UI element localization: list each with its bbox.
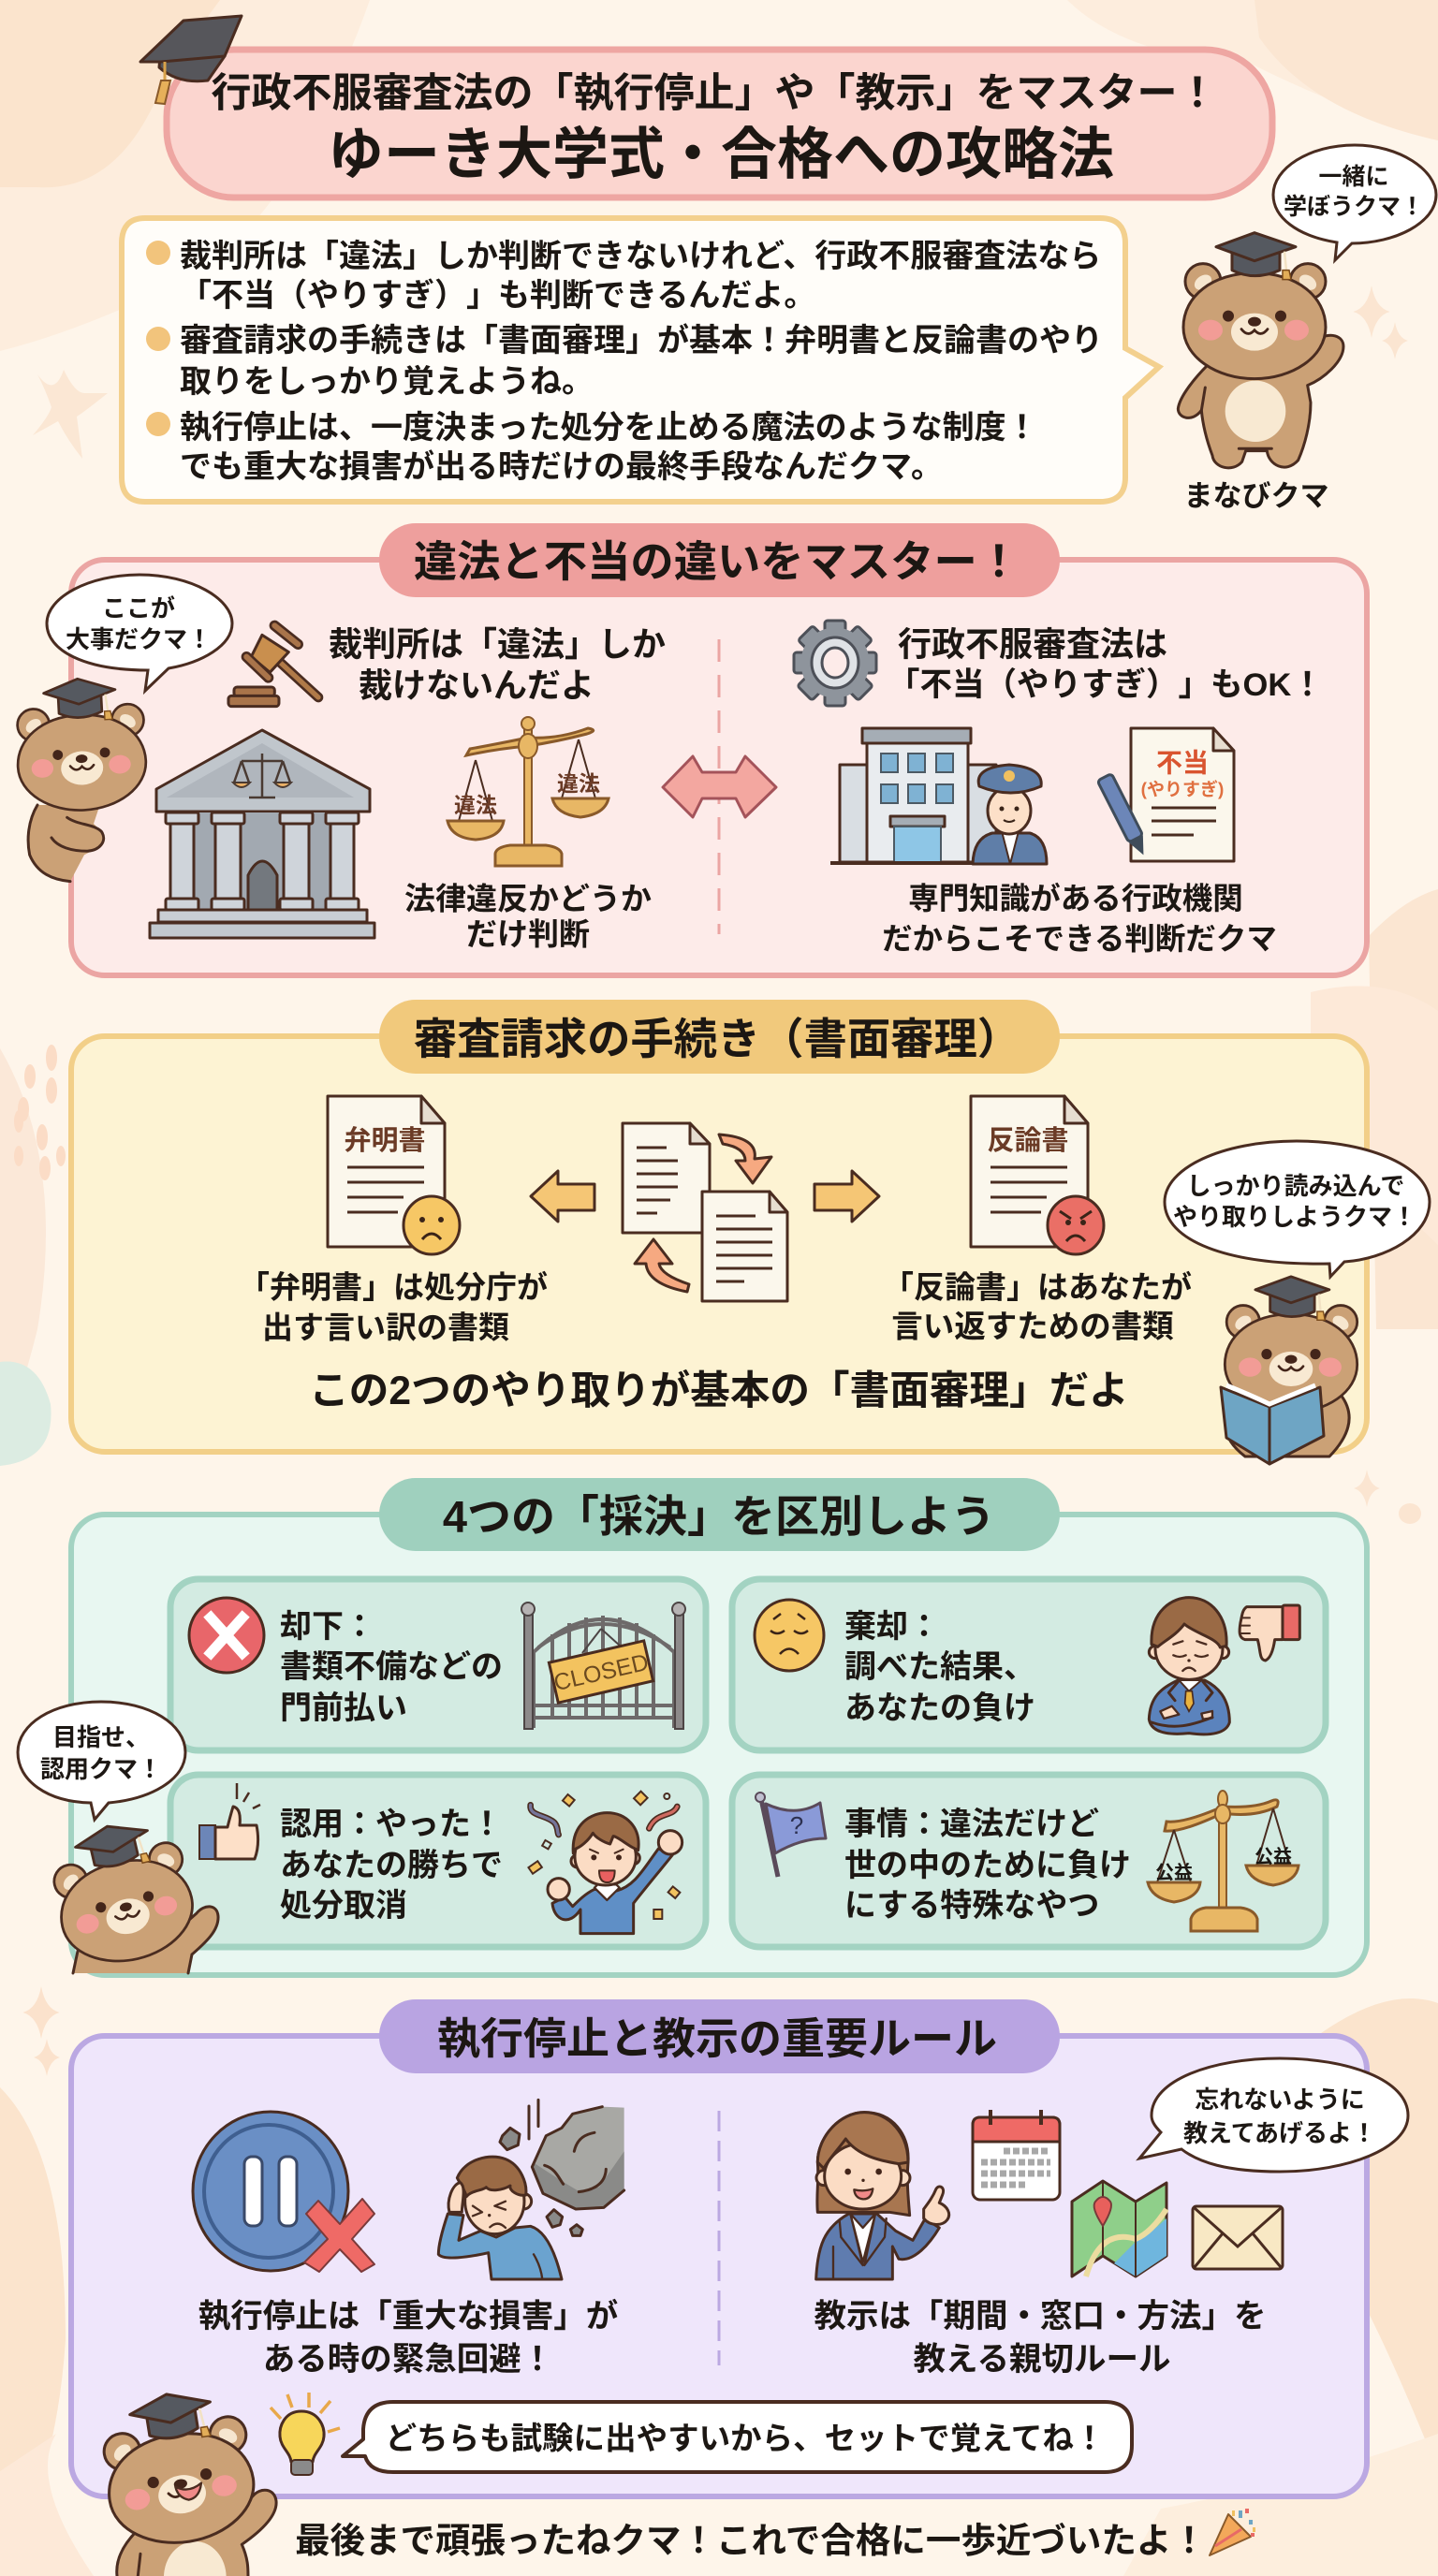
heading: 4つの「採決」を区別しよう — [443, 1492, 995, 1541]
heading — [379, 523, 1060, 597]
icon: gavel — [228, 625, 318, 707]
caption: instruction: 教える親切ルール — [914, 2342, 1170, 2378]
icon: document unjust: (やりすぎ) — [1141, 779, 1224, 799]
icon: document unjust — [1131, 728, 1234, 861]
icon: x circle — [189, 1598, 264, 1673]
text: admin review: 行政不服審査法は — [898, 625, 1167, 663]
bullet 1: 「不当（やりすぎ）」も判断できるんだよ。 — [180, 278, 815, 314]
bear: peeking — [13, 676, 148, 882]
caption: law only — [404, 882, 652, 951]
text: あなたの勝ちで — [280, 1848, 503, 1883]
arrow: left — [531, 1171, 594, 1222]
bullet 3 — [146, 410, 1038, 485]
text: courts — [329, 625, 666, 704]
callout: exam hint: どちらも試験に出やすいから、セットで覚えてね！ — [386, 2422, 1105, 2456]
caption: benmeisho: 「弁明書」は処分庁が — [239, 1269, 548, 1305]
text — [280, 1609, 503, 1726]
speech bubble: together: 学ぼうクマ！ — [1284, 194, 1424, 220]
icon: person under rock — [438, 2100, 624, 2279]
document: hanronsho — [971, 1096, 1104, 1254]
icon: light bulb — [271, 2393, 340, 2475]
title line 2: ゆーき大学式・合格への攻略法 — [328, 124, 1114, 185]
text: admin review — [888, 625, 1324, 703]
arrow: double — [663, 756, 776, 817]
speech bubble: teach: 忘れないように — [1195, 2086, 1365, 2114]
icon: closed gate: CLOSED — [551, 1649, 651, 1696]
icon: party popper — [1210, 2509, 1255, 2555]
heading: 執行停止と教示の重要ルール — [437, 2014, 997, 2063]
bear: manabi kuma — [1178, 233, 1343, 468]
text: 処分取消 — [280, 1888, 407, 1924]
closing message: 最後まで頑張ったねクマ！これで合格に一歩近づいたよ！ — [295, 2521, 1207, 2560]
icon: scale: 違法 — [454, 793, 497, 817]
icon: scale public interest: 公益 — [1255, 1846, 1292, 1867]
speech bubble: together: 一緒に — [1318, 164, 1389, 190]
document: benmeisho: 弁明書 — [344, 1125, 426, 1156]
caption: instruction: 教示は「期間・窓口・方法」を — [814, 2299, 1266, 2334]
callout: exam hint — [343, 2402, 1132, 2472]
icon: flag — [756, 1793, 826, 1877]
caption: hanronsho: 「反論書」はあなたが — [883, 1269, 1192, 1305]
heading — [379, 1000, 1060, 1074]
bear name: まなびクマ — [1183, 479, 1329, 513]
title banner — [167, 50, 1272, 198]
bullet 1: 裁判所は「違法」しか判断できないけれど、行政不服審査法なら — [180, 239, 1101, 274]
text: 門前払い — [280, 1690, 407, 1726]
heading: 違法と不当の違いをマスター！ — [414, 537, 1020, 586]
caption: law only: だけ判断 — [466, 917, 590, 951]
text: にする特殊なやつ — [844, 1888, 1099, 1924]
caption: hanronsho: 言い返すための書類 — [891, 1310, 1174, 1344]
icon: document unjust: 不当 — [1156, 749, 1209, 777]
text: 認用：やった！ — [280, 1807, 503, 1842]
icon: cheering man — [528, 1792, 682, 1934]
caption: hanronsho — [883, 1269, 1192, 1344]
title line 1: 行政不服審査法の「執行停止」や「教示」をマスター！ — [212, 71, 1217, 116]
caption: instruction — [814, 2299, 1266, 2378]
caption: expertise: 専門知識がある行政機関 — [908, 881, 1243, 915]
speech bubble: important: 大事だクマ！ — [66, 625, 212, 653]
speech bubble: together — [1273, 145, 1436, 260]
text: 事情：違法だけど — [844, 1807, 1099, 1842]
text: courts: 裁けないんだよ — [359, 666, 594, 704]
caption: stay — [198, 2298, 618, 2378]
text: admin review: 「不当（やりすぎ）」もOK！ — [888, 667, 1324, 703]
icon: sad face — [755, 1600, 824, 1671]
icon: pen — [1097, 773, 1151, 858]
icon: gear — [794, 621, 876, 706]
icon: scale: 違法 — [557, 771, 600, 796]
card: rejection — [732, 1579, 1326, 1750]
text: 書類不備などの — [280, 1649, 503, 1685]
speech bubble: read carefully: やり取りしようクマ！ — [1173, 1203, 1416, 1231]
bullet 2: 取りをしっかり覚えようね。 — [180, 364, 594, 400]
icon: envelope — [1193, 2206, 1283, 2269]
text: 世の中のために負け — [844, 1848, 1131, 1883]
bear: cheering bottom — [95, 2383, 276, 2576]
card: special — [732, 1775, 1326, 1947]
icon: scale public interest — [1148, 1791, 1299, 1931]
caption: expertise — [882, 881, 1277, 956]
speech bubble: teach — [1139, 2058, 1408, 2172]
bear: waving — [43, 1811, 218, 1973]
icon: scale public interest: 公益 — [1155, 1862, 1193, 1883]
icon: exchanged documents — [623, 1123, 787, 1301]
document: hanronsho: 反論書 — [987, 1125, 1069, 1156]
icon: thumb up — [199, 1783, 260, 1859]
icon: office building — [830, 728, 996, 863]
text — [280, 1807, 503, 1924]
bullet 3: 執行停止は、一度決まった処分を止める魔法のような制度！ — [180, 410, 1038, 446]
icon: pause with x — [193, 2112, 374, 2272]
caption: law only: 法律違反かどうか — [404, 882, 652, 915]
panel: four decisions — [71, 1478, 1367, 1975]
text: 却下： — [280, 1609, 375, 1645]
document: benmeisho — [328, 1096, 460, 1254]
icon: courthouse — [150, 730, 374, 938]
caption: benmeisho: 出す言い訳の書類 — [262, 1310, 509, 1344]
icon: flag: ? — [790, 1811, 803, 1839]
speech bubble: important — [47, 575, 232, 691]
panel: written review — [71, 1000, 1367, 1452]
speech bubble: aim for approval: 目指せ、 — [52, 1723, 150, 1751]
bullet 2: 審査請求の手続きは「書面審理」が基本！弁明書と反論書のやり — [180, 322, 1103, 359]
caption: benmeisho — [239, 1269, 548, 1344]
icon: calendar — [973, 2110, 1060, 2200]
text: あなたの負け — [844, 1690, 1035, 1726]
icon: officer — [973, 765, 1047, 864]
speech bubble: important: ここが — [102, 594, 175, 622]
arrow: right — [814, 1171, 879, 1222]
panel: stay of execution and instruction — [71, 1999, 1408, 2496]
summary text: この2つのやり取りが基本の「書面審理」だよ — [309, 1368, 1129, 1413]
icon: closed gate — [521, 1603, 685, 1729]
icon: graduation cap — [140, 16, 242, 104]
text: courts: 裁判所は「違法」しか — [329, 625, 666, 663]
text — [844, 1609, 1035, 1726]
speech bubble: read carefully: しっかり読み込んで — [1187, 1172, 1404, 1200]
intro bubble — [122, 218, 1159, 502]
icon: scale — [448, 717, 609, 866]
bullet 2 — [146, 322, 1103, 400]
panel: illegal vs unjust — [71, 523, 1367, 975]
speech bubble: aim for approval — [18, 1702, 185, 1820]
text — [844, 1807, 1131, 1924]
speech bubble: teach: 教えてあげるよ！ — [1183, 2119, 1376, 2147]
icon: thumb down — [1240, 1605, 1299, 1661]
bullet 3: でも重大な損害が出る時だけの最終手段なんだクマ。 — [180, 448, 943, 485]
bear: reading — [1221, 1277, 1357, 1464]
icon: woman — [816, 2113, 949, 2279]
speech bubble: aim for approval: 認用クマ！ — [40, 1755, 162, 1783]
card: granted — [170, 1775, 706, 1947]
card: dismissal — [170, 1579, 706, 1750]
caption: stay: 執行停止は「重大な損害」が — [198, 2298, 618, 2334]
heading — [379, 1478, 1060, 1551]
text: 棄却： — [844, 1609, 940, 1645]
heading: 審査請求の手続き（書面審理） — [414, 1015, 1020, 1063]
icon: sad man — [1149, 1598, 1229, 1734]
caption: expertise: だからこそできる判断だクマ — [882, 922, 1277, 956]
caption: stay: ある時の緊急回避！ — [263, 2342, 553, 2378]
bullet 1 — [146, 239, 1101, 314]
icon: map — [1072, 2181, 1167, 2276]
text: 調べた結果、 — [844, 1649, 1035, 1685]
heading — [379, 1999, 1060, 2073]
speech bubble: read carefully — [1165, 1141, 1430, 1277]
